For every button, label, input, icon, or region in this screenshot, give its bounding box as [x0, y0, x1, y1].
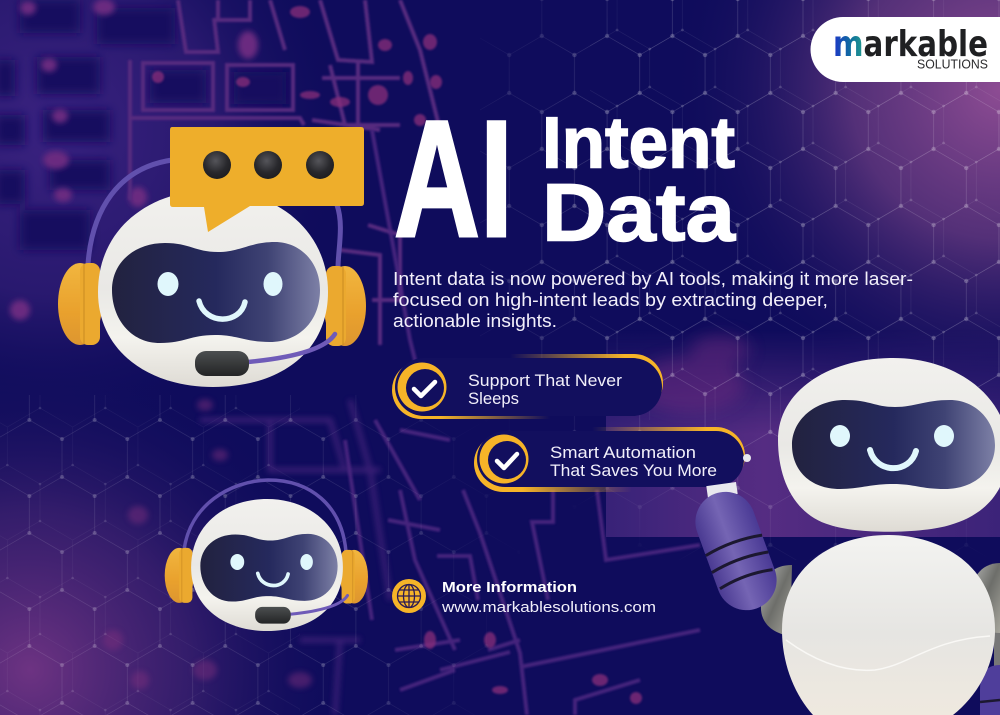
- pill label: [468, 372, 623, 408]
- stem and knob: [706, 454, 751, 498]
- raised arm: [687, 483, 785, 619]
- pill label: [550, 444, 717, 480]
- globe icon: [392, 579, 426, 613]
- title: Intent: Intent: [542, 104, 735, 184]
- robot head: [778, 358, 1000, 532]
- description text: Intent data is now powered by AI tools, making it more laser-: [393, 269, 913, 289]
- robot head: [58, 190, 366, 387]
- title: Data: Data: [542, 168, 737, 258]
- logo panel: [810, 17, 1000, 82]
- left robot with speech bubble: [58, 127, 366, 387]
- description text: focused on high-intent leads by extracting deeper,: [393, 290, 828, 310]
- logo subtitle: SOLUTIONS: [917, 58, 988, 72]
- robot head: [165, 499, 368, 631]
- title: AI: AI: [394, 87, 513, 272]
- description text: [393, 269, 913, 331]
- check icon: [398, 362, 446, 412]
- headband: [88, 160, 340, 268]
- headband: [184, 480, 346, 552]
- visor: [792, 400, 995, 489]
- large robot: [687, 358, 1000, 715]
- contact information: [441, 580, 656, 616]
- speech bubble: [170, 127, 364, 232]
- contact information: More Information: [442, 580, 577, 596]
- purple glow block behind robot: [606, 330, 1000, 537]
- small robot with headset: [165, 480, 368, 631]
- left joint: [761, 565, 792, 636]
- pill label: That Saves You More: [550, 462, 717, 480]
- robot body: [782, 535, 995, 715]
- magenta haze: [635, 335, 750, 413]
- description text: actionable insights.: [393, 311, 557, 331]
- check icon: [480, 434, 528, 484]
- eyes and smile: [830, 425, 954, 468]
- contact information: www.markablesolutions.com: [441, 599, 656, 616]
- feature pill: support: [392, 354, 663, 419]
- right joint and lower arm: [970, 563, 1000, 715]
- circuit board texture: [0, 0, 700, 715]
- feature pill: automation: [474, 427, 745, 492]
- pill label: Support That Never: [468, 372, 623, 390]
- pill label: Sleeps: [468, 390, 519, 408]
- pill label: Smart Automation: [550, 444, 696, 462]
